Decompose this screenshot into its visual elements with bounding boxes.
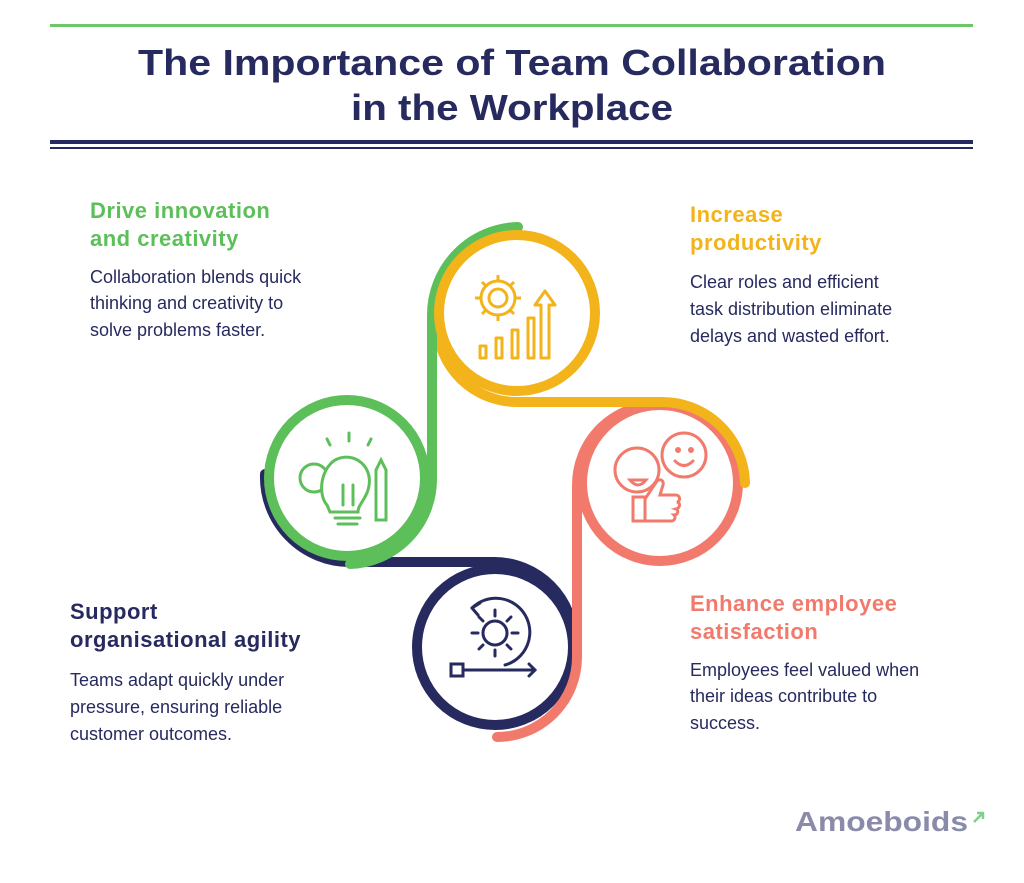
panel: employee satisfaction: success.	[690, 713, 760, 733]
title	[138, 42, 886, 128]
icon: faces and thumbs up	[615, 433, 706, 521]
panel: increase productivity	[690, 202, 892, 346]
panel: employee satisfaction: satisfaction	[690, 619, 818, 644]
panel: increase productivity: Clear roles and efficient	[690, 272, 879, 292]
icon: lightbulb gear pencil	[300, 433, 386, 524]
panel: organisational agility	[70, 599, 301, 744]
icon: agile cycle	[451, 598, 535, 676]
panel: employee satisfaction	[690, 591, 919, 733]
icon: gear and growth chart	[475, 275, 555, 358]
panel: increase productivity: productivity	[690, 230, 822, 255]
panel: organisational agility: pressure, ensuring reliable	[70, 697, 282, 717]
title: The Importance of Team Collaboration	[138, 42, 886, 83]
title: in the Workplace	[351, 87, 673, 128]
panel: drive innovation: and creativity	[90, 226, 239, 251]
panel: drive innovation: thinking and creativity to	[90, 293, 283, 313]
panel: increase productivity: task distribution eliminate	[690, 299, 892, 319]
panel: increase productivity: Increase	[690, 202, 783, 227]
panel: employee satisfaction: Enhance employee	[690, 591, 897, 616]
diagram: connected circles	[265, 227, 745, 737]
panel: organisational agility: Support	[70, 599, 158, 624]
panel: organisational agility: organisational agility	[70, 627, 301, 652]
panel: drive innovation	[90, 198, 302, 340]
panel: employee satisfaction: their ideas contribute to	[690, 686, 877, 706]
panel: drive innovation: solve problems faster.	[90, 320, 265, 340]
panel: employee satisfaction: Employees feel valued when	[690, 660, 919, 680]
panel: drive innovation: Drive innovation	[90, 198, 270, 223]
panel: drive innovation: Collaboration blends quick	[90, 267, 302, 287]
panel: organisational agility: Teams adapt quickly under	[70, 670, 284, 690]
panel: increase productivity: delays and wasted effort.	[690, 326, 890, 346]
logo: Amoeboids	[795, 806, 968, 837]
panel: organisational agility: customer outcomes.	[70, 724, 232, 744]
